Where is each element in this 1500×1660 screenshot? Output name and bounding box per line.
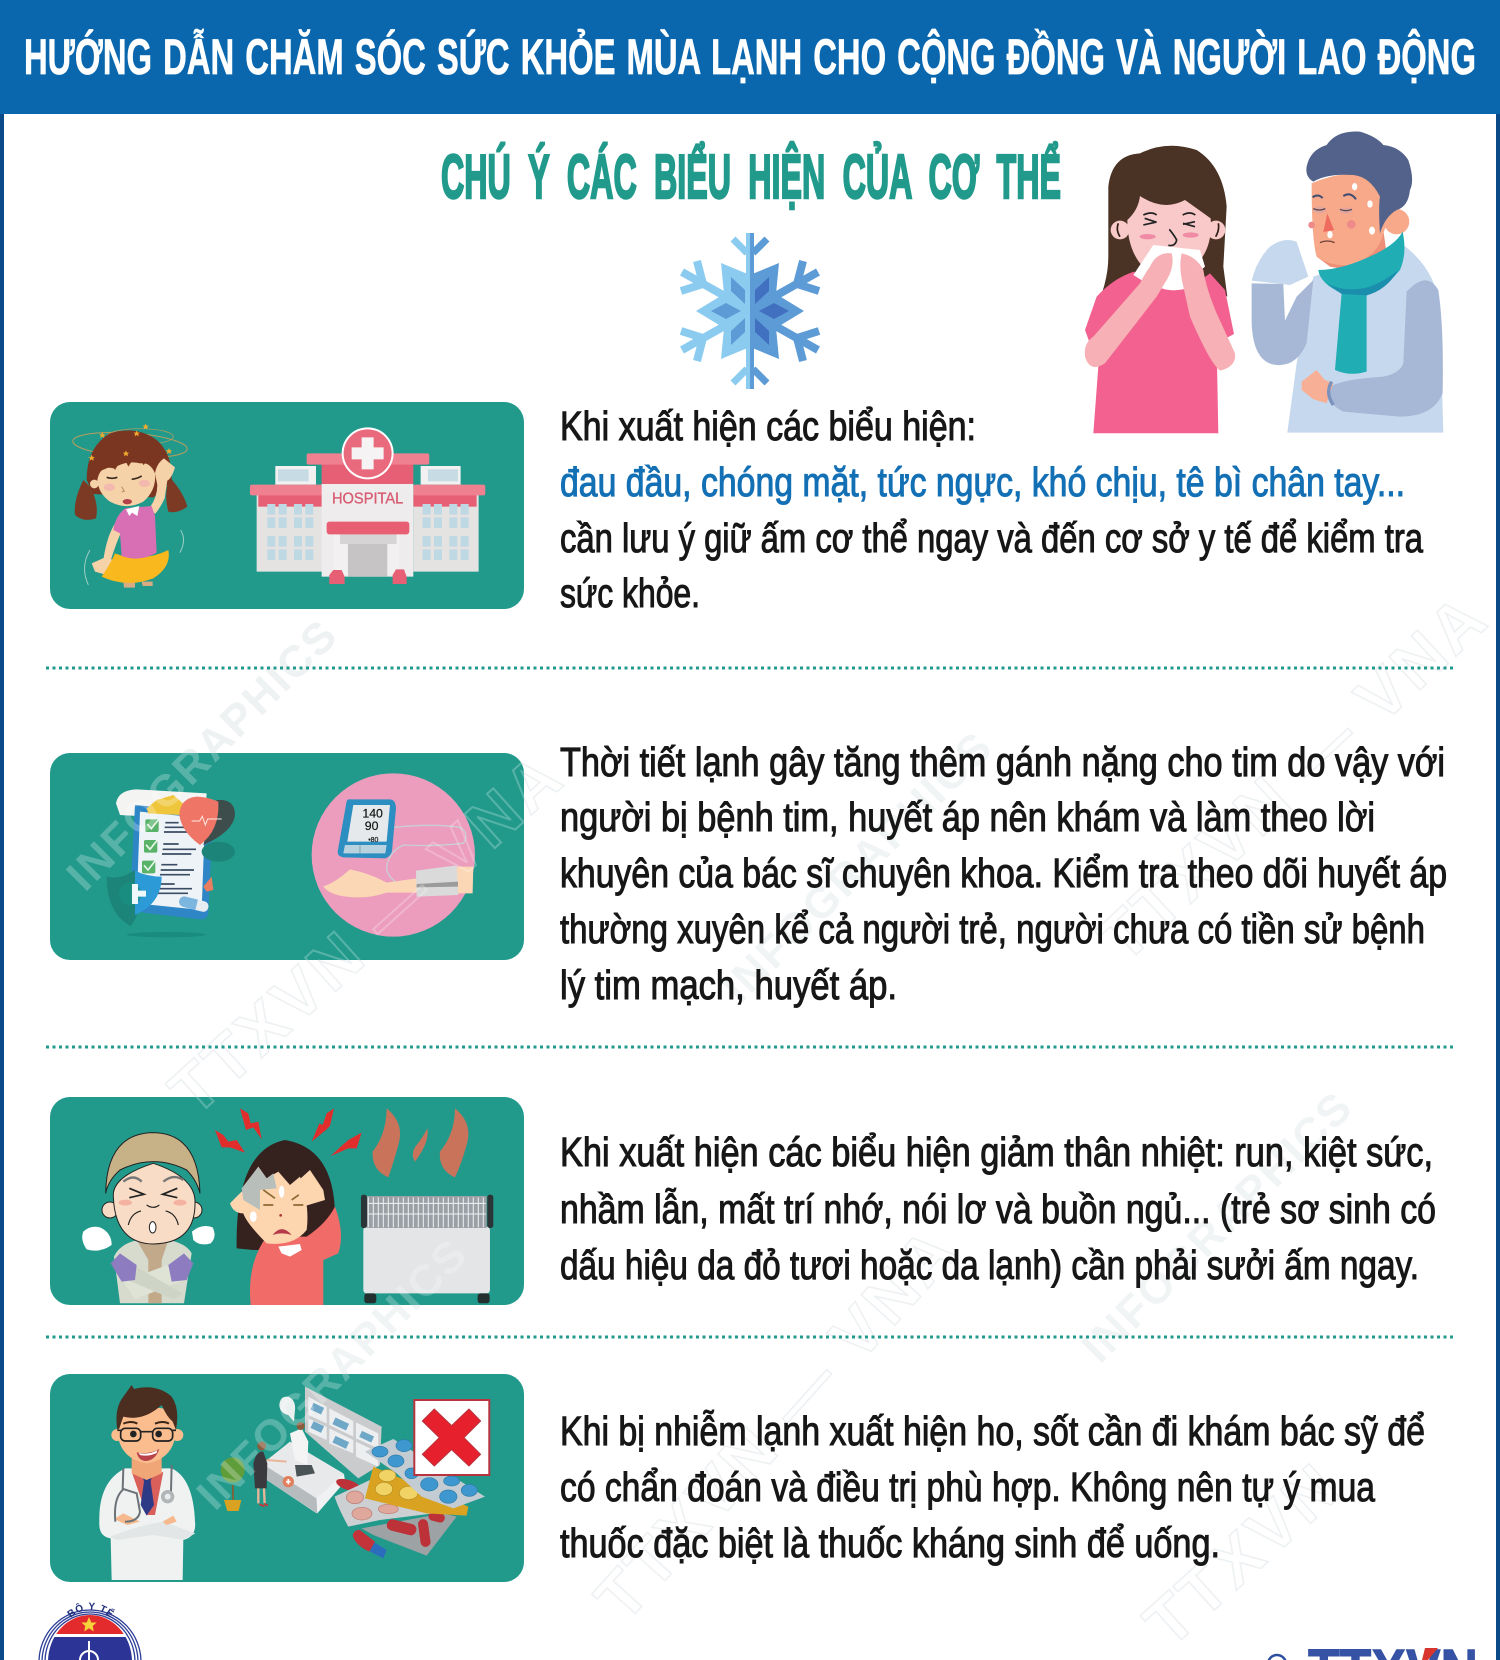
dotted separators: [46, 668, 1454, 1337]
hospital building: [250, 427, 485, 584]
watermarks over panels: TTXVN — VNA: [155, 737, 578, 1128]
watermarks over panels: INFOGRAPHICS: [57, 610, 348, 900]
panel 4: doctor, pharmacy, pills, no-self-medication: [50, 1374, 524, 1582]
text block 2: lý tim mạch, huyết áp.: [560, 962, 897, 1008]
hospital building: HOSPITAL: [332, 490, 404, 507]
lightning bolts: [215, 1108, 362, 1156]
watermarks on background: TTXVN — VNA: [580, 1212, 972, 1634]
text block 4: [560, 1408, 1425, 1566]
watermarks on background: TTXVN: [1130, 1447, 1355, 1660]
text block 1: Khi xuất hiện các biểu hiện:: [560, 403, 976, 449]
watermarks over panels: INFOGRAPHICS: [187, 1229, 478, 1519]
watermarks on background: TTXVN — VNA: [1084, 579, 1500, 975]
woman holding head: [230, 1140, 341, 1305]
text block 1: sức khỏe.: [560, 570, 700, 616]
text block 1: [560, 403, 1423, 616]
watermarks on background: INFOGRAPHICS: [1072, 1082, 1363, 1372]
panel 2: medical record and blood pressure: [50, 753, 524, 960]
man coughing with scarf: [1252, 131, 1443, 433]
shivering old man: [82, 1133, 215, 1303]
dizzy girl: [72, 423, 188, 588]
blood pressure monitor on arm: [312, 773, 475, 937]
blister pill packs: [335, 1439, 485, 1558]
watermarks on background: TTXVN — VNA: [155, 737, 578, 1128]
electric heater: [361, 1195, 493, 1303]
text block 3: [560, 1129, 1436, 1288]
blood pressure monitor on arm: 90: [365, 819, 379, 833]
header banner: [0, 0, 1500, 114]
watermarks on background: INFOGRAPHICS: [57, 610, 348, 900]
text block 2: [560, 739, 1447, 1008]
watermarks on background: [57, 579, 1500, 1660]
pharmacy counter: [221, 1387, 382, 1513]
girl sneezing into tissue: [1085, 146, 1235, 433]
logo: Bo Y Te: BỘ Y TẾ: [66, 1602, 116, 1618]
panel 3: cold elder, feverish woman, heater: [50, 1097, 524, 1305]
text block 4: thuốc đặc biệt là thuốc kháng sinh để uống.: [560, 1520, 1220, 1566]
blood pressure monitor on arm: 140: [362, 806, 383, 820]
watermarks on background: INFOGRAPHICS: [712, 722, 1003, 1012]
icon: snowflake: [681, 233, 819, 389]
panel 1: dizzy girl and hospital: [50, 402, 524, 609]
blood pressure monitor on arm: •80: [368, 837, 379, 844]
watermarks on background: INFOGRAPHICS: [187, 1229, 478, 1519]
watermarks over panels: [66, 753, 524, 1510]
illustration: sick girl and man: [1085, 131, 1443, 433]
red X warning sign: [414, 1400, 489, 1475]
clipboard with heart and shield: [107, 789, 235, 937]
logo: Bo Y Te: [38, 1602, 142, 1660]
steam waves: [373, 1108, 468, 1177]
doctor: [99, 1385, 195, 1580]
